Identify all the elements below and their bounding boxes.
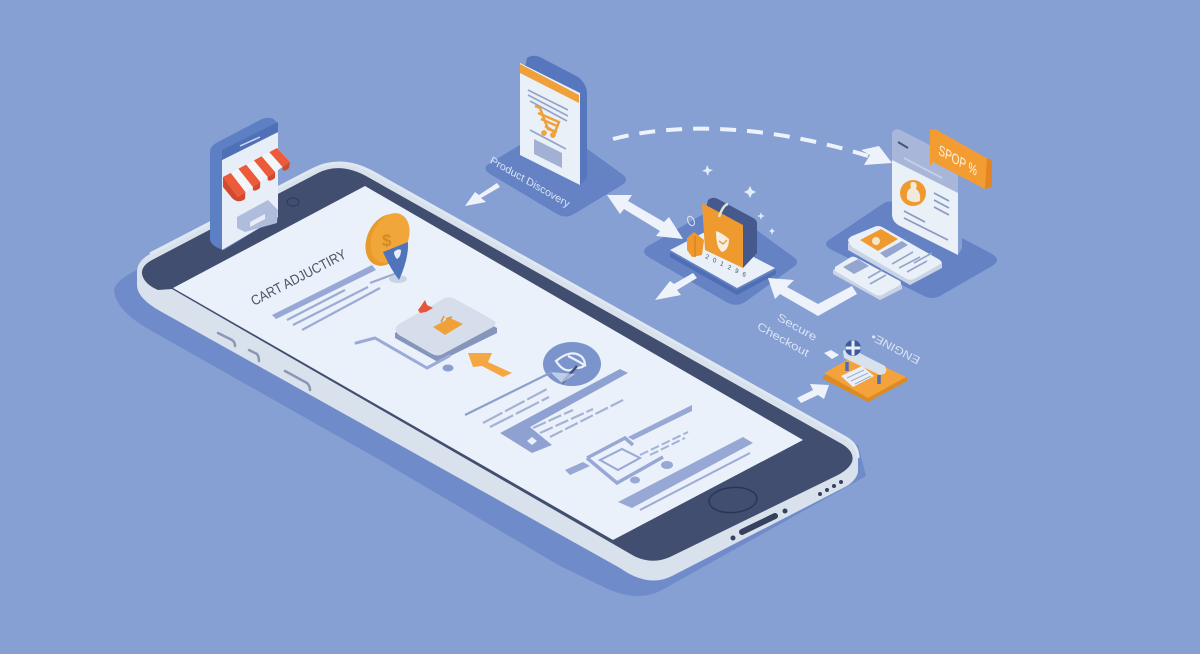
label: secure: Secure: [776, 311, 817, 345]
tray base: [395, 302, 497, 362]
heading: CART ADJUCTIRY: [248, 246, 349, 309]
side buttons: [218, 333, 310, 390]
card side: [520, 56, 587, 185]
panel: secure checkout: [756, 311, 922, 402]
bag front: [702, 203, 743, 268]
card: [670, 232, 775, 288]
panel: shopping bag: [644, 165, 797, 305]
arrow: bag to phone: [655, 273, 697, 300]
tag text: SPOP %: [938, 141, 978, 179]
receipt: [841, 366, 874, 387]
machine legs: [847, 362, 879, 384]
orange base edge: [823, 375, 907, 402]
orange base: [824, 354, 906, 398]
icon: map pin: [383, 242, 408, 283]
card face: [892, 130, 958, 255]
front camera: [287, 198, 299, 206]
card lines: [904, 193, 949, 240]
text lines: [287, 273, 397, 330]
card side: [958, 191, 962, 255]
speaker slot and ports: [730, 480, 843, 540]
tray with product: [395, 297, 497, 362]
list block 1: [465, 369, 628, 453]
panel: product discovery: [486, 56, 626, 216]
arrow: dashed curve: [613, 129, 892, 165]
small card 2: [833, 257, 902, 300]
arrow: bent return: [768, 278, 857, 316]
orange header: [520, 64, 579, 103]
sparkles: [702, 165, 775, 235]
card button: [534, 139, 562, 168]
small card 1: [848, 226, 942, 285]
platform: [644, 207, 797, 305]
icon: coin: $: [382, 231, 392, 250]
label: Product Discovery: [489, 154, 571, 212]
card top section: [892, 130, 958, 193]
machine roller: [843, 347, 886, 375]
panel: cart heading area: [248, 246, 397, 330]
label: checkout: Checkout: [756, 320, 810, 361]
label: inverted engine: ENGINE•: [869, 330, 922, 366]
shop drawer: [237, 200, 278, 232]
card header: [222, 122, 278, 160]
text lines: [528, 90, 568, 149]
card body: [210, 118, 278, 250]
phone body: [137, 163, 858, 580]
icon: red marker: [418, 300, 433, 313]
small tag: [824, 350, 839, 359]
icon: orange product: [433, 318, 463, 335]
icon: coin: [358, 207, 417, 272]
bag back: [703, 198, 757, 268]
bag emblem: [716, 231, 729, 252]
bag handle: [719, 204, 728, 217]
orange tag: [930, 129, 992, 189]
heading bar: [272, 265, 376, 319]
card face: [520, 63, 580, 185]
home button: [708, 486, 758, 514]
list panel: [500, 369, 628, 453]
arrow: to checkout: [797, 384, 829, 403]
arrow: orange: [468, 353, 512, 377]
screen: [173, 186, 803, 540]
phone shadow: [114, 270, 866, 596]
icon: cross badge: [845, 340, 861, 356]
tray top: [396, 297, 496, 356]
phone bezel: [142, 168, 853, 561]
icon: avatar: [900, 180, 926, 206]
card digits: 2 0 1 2 9 6: [704, 253, 748, 280]
arrow: to phone: [465, 183, 500, 206]
platform: [826, 202, 997, 298]
tag loop: [686, 215, 696, 227]
arrow: two-way: [607, 195, 683, 239]
card edge: [670, 252, 776, 295]
phone rim highlight: [150, 163, 858, 458]
panel: offer card: [826, 129, 997, 300]
bar caption line: [640, 453, 750, 510]
awning: [223, 148, 290, 197]
large bar: [618, 437, 753, 508]
platform: [486, 126, 626, 216]
phone: [137, 163, 858, 580]
cart outline block: [565, 405, 692, 484]
icon: shopping cart: [535, 106, 559, 137]
gift box: [687, 232, 704, 257]
panel: storefront card: [210, 118, 290, 250]
cart line: [356, 338, 454, 372]
card face: [222, 132, 278, 250]
icon: link circle with pen: [543, 342, 601, 386]
